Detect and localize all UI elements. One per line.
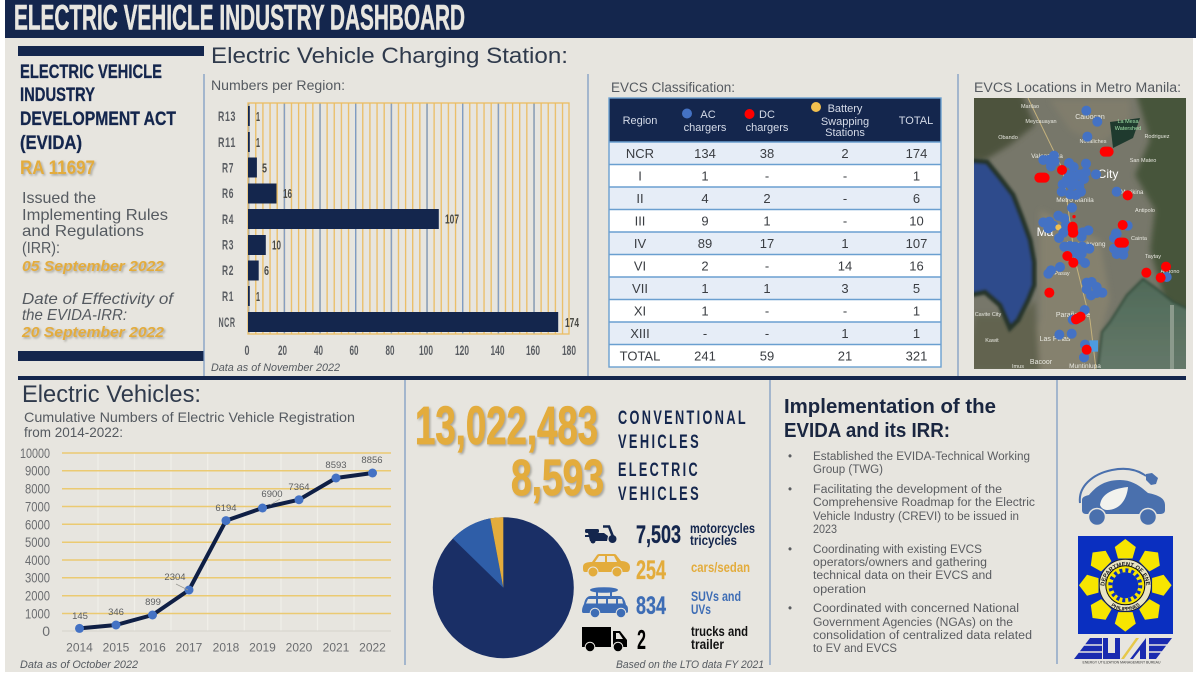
table rows: -	[765, 168, 769, 184]
table rows: 59	[760, 348, 774, 364]
registration line	[80, 473, 372, 628]
effectivity date: 20 September 2022	[21, 324, 165, 341]
y axis labels: 1000	[25, 606, 50, 622]
table rows: -	[843, 214, 847, 228]
data labels: 6900	[261, 489, 283, 500]
x axis labels: 2021	[323, 640, 350, 654]
electric label: ELECTRIC	[618, 460, 700, 481]
row: motorcycles	[585, 520, 755, 549]
panel: implementation of the EVIDA	[784, 396, 1035, 655]
value axis: 180	[562, 342, 576, 358]
value axis: 80	[386, 342, 395, 358]
map place labels	[975, 104, 1179, 370]
x axis labels: 2015	[103, 640, 130, 654]
region labels: R2	[222, 262, 234, 278]
row: SUVs	[582, 587, 741, 620]
x axis labels: 2022	[359, 640, 386, 654]
bullet: TWG	[788, 451, 1030, 476]
table header: chargers	[746, 122, 789, 134]
panel: numbers per region bar chart	[211, 77, 579, 374]
y axis labels: 5000	[25, 534, 50, 550]
table rows: VI	[634, 258, 646, 274]
map place labels: Angono	[1161, 269, 1179, 275]
y axis labels: 9000	[25, 462, 50, 478]
table rows: 174	[906, 146, 927, 161]
bar values: 16	[283, 186, 292, 201]
heading: EVIDA name: DEVELOPMENT ACT	[20, 109, 176, 130]
IRR issue date: and Regulations	[22, 223, 144, 240]
value axis: 100	[419, 342, 433, 358]
map place labels: Las Piñas	[1040, 336, 1071, 343]
heading: EVIDA name: ELECTRIC VEHICLE	[20, 62, 162, 83]
conventional label: VEHICLES	[618, 432, 701, 453]
table rows: 9	[701, 214, 709, 228]
table rows: 1	[701, 168, 709, 184]
y axis labels: 8000	[25, 480, 50, 496]
row: cars	[583, 554, 750, 585]
chart heading	[24, 409, 355, 440]
data note: Data as of October 2022	[20, 659, 138, 671]
data labels: 6194	[215, 503, 237, 514]
x axis labels: 2014	[66, 640, 93, 654]
row: trucks: trucks and	[691, 623, 748, 639]
panel: vehicle totals	[415, 396, 764, 671]
map place labels: Caloocan	[1075, 114, 1105, 121]
region labels: R11	[218, 134, 236, 150]
satellite map	[974, 98, 1186, 369]
y axis labels: 10000	[20, 445, 50, 461]
pie chart	[433, 517, 574, 658]
bullet: coordinating	[788, 544, 992, 596]
table rows: 1	[841, 236, 849, 251]
y axis labels: 7000	[25, 498, 50, 514]
map place labels: Imus	[1012, 364, 1024, 370]
row: motorcycles: 7,503	[636, 521, 681, 549]
value axis: 120	[455, 342, 469, 358]
data labels: 899	[145, 597, 161, 608]
table header: Stations	[825, 127, 865, 139]
heading: EVIDA name: (EVIDA)	[20, 133, 82, 154]
table header: chargers	[684, 122, 727, 134]
data labels: 346	[108, 607, 124, 618]
bar values: 107	[445, 212, 459, 226]
table header	[623, 102, 933, 139]
table rows: 1	[913, 304, 920, 318]
table rows: 38	[760, 146, 774, 161]
bar values: 1	[256, 109, 260, 124]
table rows: 1	[841, 326, 849, 341]
heading	[784, 396, 996, 442]
table rows: 5	[913, 281, 920, 296]
region labels: NCR	[218, 314, 236, 330]
map place labels: Cainta	[1131, 236, 1148, 242]
region labels: R13	[218, 108, 236, 124]
bars	[248, 106, 558, 332]
icon: electric car with leaf	[1080, 469, 1165, 526]
map place labels: Cavite City	[975, 312, 1002, 318]
bullet: NGAs: consolidation of centralized data related	[813, 630, 1032, 642]
heading: EVIDA name: INDUSTRY	[20, 85, 95, 106]
Manila Bay	[965, 160, 1034, 328]
table rows: IV	[634, 236, 646, 251]
row: motorcycles: tricycles	[690, 532, 737, 548]
bullet: CREVI: 2023	[813, 524, 837, 536]
icon: car	[583, 554, 630, 577]
map place labels: Novaliches	[1080, 139, 1107, 145]
region labels	[218, 108, 236, 330]
conventional label	[618, 408, 748, 453]
table rows: NCR	[626, 146, 654, 161]
data labels: 7364	[288, 482, 310, 493]
value axis: 0	[244, 342, 250, 358]
panel: EVIDA act	[18, 46, 204, 361]
map place labels: City	[1098, 167, 1118, 181]
Laguna Lake	[1096, 277, 1186, 369]
bullet: CREVI: Facilitating the development of the	[813, 484, 1002, 496]
effectivity date: Date of Effectivity of	[22, 291, 175, 308]
y axis labels: 4000	[25, 552, 50, 568]
table rows: I	[638, 168, 642, 184]
table rows: TOTAL	[620, 348, 660, 364]
chart heading: from 2014-2022:	[24, 424, 123, 440]
IRR issue date: Implementing Rules	[22, 207, 168, 224]
map place labels: Antipolo	[1135, 208, 1155, 214]
bullet: NGAs: Government Agencies (NGAs) on the	[813, 617, 1013, 629]
row: trucks: trailer	[691, 636, 724, 652]
map place labels: Muntinlupa	[1069, 363, 1101, 370]
data labels: 8856	[361, 455, 383, 466]
bullet: TWG: •	[788, 451, 792, 463]
value axis	[244, 342, 576, 358]
icon: truck	[582, 627, 627, 652]
table rows: 1	[763, 214, 771, 228]
value axis: 40	[314, 342, 323, 358]
bullet: CREVI: •	[788, 484, 792, 496]
y axis labels: 2000	[25, 588, 50, 604]
La Mesa watershed	[1110, 118, 1140, 148]
logo: Energy Utilization Management Bureau	[1074, 638, 1172, 664]
section heading: Electric Vehicles:	[22, 381, 201, 408]
table rows: 3	[841, 281, 849, 296]
row: cars: 254	[636, 555, 666, 585]
row: motorcycles: motorcycles	[690, 520, 755, 536]
bullet: NGAs: •	[788, 603, 792, 615]
table rows: 10	[909, 214, 924, 228]
logo: Department of Energy: PHILIPPINES	[1111, 603, 1140, 610]
y axis labels: 6000	[25, 516, 50, 532]
bullet: CREVI: Vehicle Industry (CREVI) to be issued in	[813, 511, 1019, 523]
electric vehicle count: 8,593	[511, 449, 604, 506]
logo: Energy Utilization Management Bureau: ENERGY UTILIZATION MANAGEMENT BUREAU	[1082, 660, 1161, 664]
bar values: 10	[272, 238, 281, 252]
AC charger dots south	[1048, 233, 1167, 357]
map place labels: Taytay	[1145, 254, 1161, 260]
IRR issue date: Issued the	[22, 190, 96, 207]
table rows: 21	[838, 348, 852, 364]
table rows: -	[765, 326, 769, 341]
bullet: coordinating: technical data on their EVCS and	[813, 570, 992, 582]
map place labels: Marikina	[1121, 190, 1144, 196]
table rows: 89	[698, 236, 712, 251]
row: trucks	[582, 623, 748, 655]
IRR issue date: (IRR):	[22, 240, 60, 257]
table rows: XIII	[630, 326, 650, 341]
value axis: 20	[278, 342, 287, 358]
map place labels: Bacoor	[1030, 359, 1053, 366]
table rows: -	[765, 304, 769, 318]
row: SUVs: 834	[636, 592, 666, 620]
icon: scooter	[585, 526, 616, 544]
table header: TOTAL	[899, 115, 933, 127]
panel: EVCS locations map	[974, 82, 1186, 369]
table header: DC	[759, 109, 775, 121]
x axis labels: 2018	[213, 640, 240, 654]
bullet: TWG: Established the EVIDA-Technical Working	[813, 451, 1030, 463]
table rows: 1	[701, 281, 709, 296]
heading: charging station: Electric Vehicle Charging Station:	[211, 43, 568, 68]
table rows: 4	[701, 191, 709, 206]
bullet: NGAs: Coordinated with concerned National	[813, 603, 1019, 615]
republic act number: RA 11697	[20, 158, 95, 179]
electric label	[618, 460, 701, 505]
map place labels: Valenzuela	[1031, 153, 1063, 160]
bar values	[256, 109, 579, 330]
region labels: R4	[222, 211, 234, 227]
region labels: R6	[222, 185, 234, 201]
map place labels: Rodriguez	[1144, 134, 1170, 140]
region labels: R3	[222, 236, 234, 252]
IRR issue date	[22, 190, 168, 275]
bar values: 6	[264, 263, 269, 278]
chart heading: Cumulative Numbers of Electric Vehicle Registration	[24, 409, 355, 425]
map place labels: La Mesa	[1117, 119, 1139, 125]
data labels: 8593	[325, 460, 347, 471]
table rows: 107	[906, 236, 927, 251]
row: SUVs: UVs	[691, 601, 711, 617]
y axis labels: 3000	[25, 570, 50, 586]
effectivity date: the EVIDA-IRR:	[22, 307, 127, 324]
bullet: coordinating: •	[788, 544, 792, 556]
table rows: 6	[913, 191, 920, 206]
table header: Battery	[828, 103, 863, 115]
table heading: EVCS Classification:	[611, 80, 735, 95]
y axis labels	[20, 445, 50, 639]
effectivity date	[21, 291, 175, 341]
panel: EVCS classification table	[609, 80, 941, 367]
table rows: XI	[634, 304, 646, 318]
bullet: TWG: Group (TWG)	[813, 464, 883, 476]
row: trucks: 2	[637, 624, 646, 655]
bar values: 1	[256, 289, 260, 304]
table rows: 2	[763, 191, 771, 206]
table header: Swapping	[821, 116, 869, 128]
data note: Data as of November 2022	[211, 362, 340, 374]
table rows: 1	[913, 326, 920, 341]
table header: AC	[700, 109, 716, 121]
value axis: 140	[490, 342, 505, 358]
map place labels: Obando	[998, 135, 1018, 141]
table rows: -	[843, 191, 847, 206]
region labels: R7	[222, 160, 234, 176]
table rows: -	[843, 304, 847, 318]
bar values: 5	[262, 160, 267, 176]
table rows: -	[703, 326, 707, 341]
bullet: coordinating: operators/owners and gathering	[813, 557, 987, 569]
table rows: 17	[760, 236, 774, 251]
table rows: 241	[694, 348, 716, 364]
table rows: 1	[701, 304, 709, 318]
icon: van	[582, 587, 628, 618]
row: cars: cars/sedan	[691, 559, 750, 575]
map place labels: Watershed	[1115, 126, 1141, 132]
table rows: III	[635, 214, 645, 228]
logo: Department of Energy: DEPARTMENT OF ENERGY	[1100, 562, 1150, 586]
data points	[75, 468, 377, 633]
row: SUVs: SUVs and	[691, 588, 741, 604]
map heading: EVCS Locations in Metro Manila:	[974, 80, 1181, 95]
table rows: 16	[909, 258, 924, 274]
heading: Implementation of the	[784, 396, 996, 418]
x axis labels: 2016	[139, 640, 166, 654]
table rows	[620, 146, 927, 364]
map place labels: San Mateo	[1130, 158, 1156, 164]
table rows: VII	[632, 281, 648, 296]
table rows: -	[765, 258, 769, 274]
AC charger dots north	[1039, 111, 1128, 233]
bullet: NGAs: to EV and EVCS	[813, 643, 897, 655]
table rows: 1	[763, 281, 771, 296]
map place labels: Pasay	[1054, 271, 1070, 277]
electric label: VEHICLES	[618, 484, 701, 505]
data labels: 145	[72, 611, 88, 622]
title banner	[5, 0, 1196, 38]
data labels	[72, 455, 383, 622]
table rows: 2	[701, 258, 709, 274]
x axis labels: 2020	[286, 640, 313, 654]
conventional vehicle count: 13,022,483	[415, 396, 598, 456]
heading: EVIDA name	[20, 62, 176, 154]
table rows: 134	[694, 146, 716, 161]
heading: EVIDA and its IRR:	[784, 420, 950, 442]
map place labels: Kawit	[985, 338, 999, 344]
IRR issue date: 05 September 2022	[22, 258, 165, 275]
bar values: 174	[565, 315, 579, 330]
chart heading: Numbers per Region:	[211, 77, 345, 93]
map place labels: Ma	[1037, 225, 1054, 239]
bullet: coordinating: operation	[813, 584, 866, 596]
table rows: 2	[841, 146, 849, 161]
data labels: 2304	[164, 572, 186, 583]
table header: Region	[623, 115, 657, 127]
bar values: 1	[256, 135, 260, 150]
bullet: coordinating: Coordinating with existing EVCS	[813, 544, 982, 556]
map place labels: Metro Manila	[1056, 197, 1094, 204]
source note: Based on the LTO data FY 2021	[616, 659, 764, 671]
bullet: CREVI: Comprehensive Roadmap for the Electric	[813, 497, 1035, 509]
y axis labels: 0	[42, 623, 50, 639]
conventional label: CONVENTIONAL	[618, 408, 748, 429]
table rows: 1	[913, 168, 920, 184]
map place labels: Mandaluyong	[1066, 241, 1106, 248]
value axis: 160	[526, 342, 540, 358]
x axis labels: 2017	[176, 640, 203, 654]
region labels: R1	[222, 288, 234, 304]
table rows: -	[843, 168, 847, 184]
table rows: 321	[906, 348, 927, 364]
map place labels: Meycauayan	[1025, 119, 1057, 125]
bullet: CREVI	[788, 484, 1035, 536]
x axis labels	[66, 640, 386, 654]
map place labels: Parañaque	[1056, 312, 1090, 319]
value axis: 60	[350, 342, 359, 358]
table rows: II	[636, 191, 644, 206]
table rows: 14	[838, 258, 852, 274]
bullet: NGAs	[788, 603, 1032, 655]
x axis labels: 2019	[249, 640, 276, 654]
panel: electric vehicles line chart	[20, 381, 391, 671]
map place labels: Marilao	[1021, 104, 1039, 110]
